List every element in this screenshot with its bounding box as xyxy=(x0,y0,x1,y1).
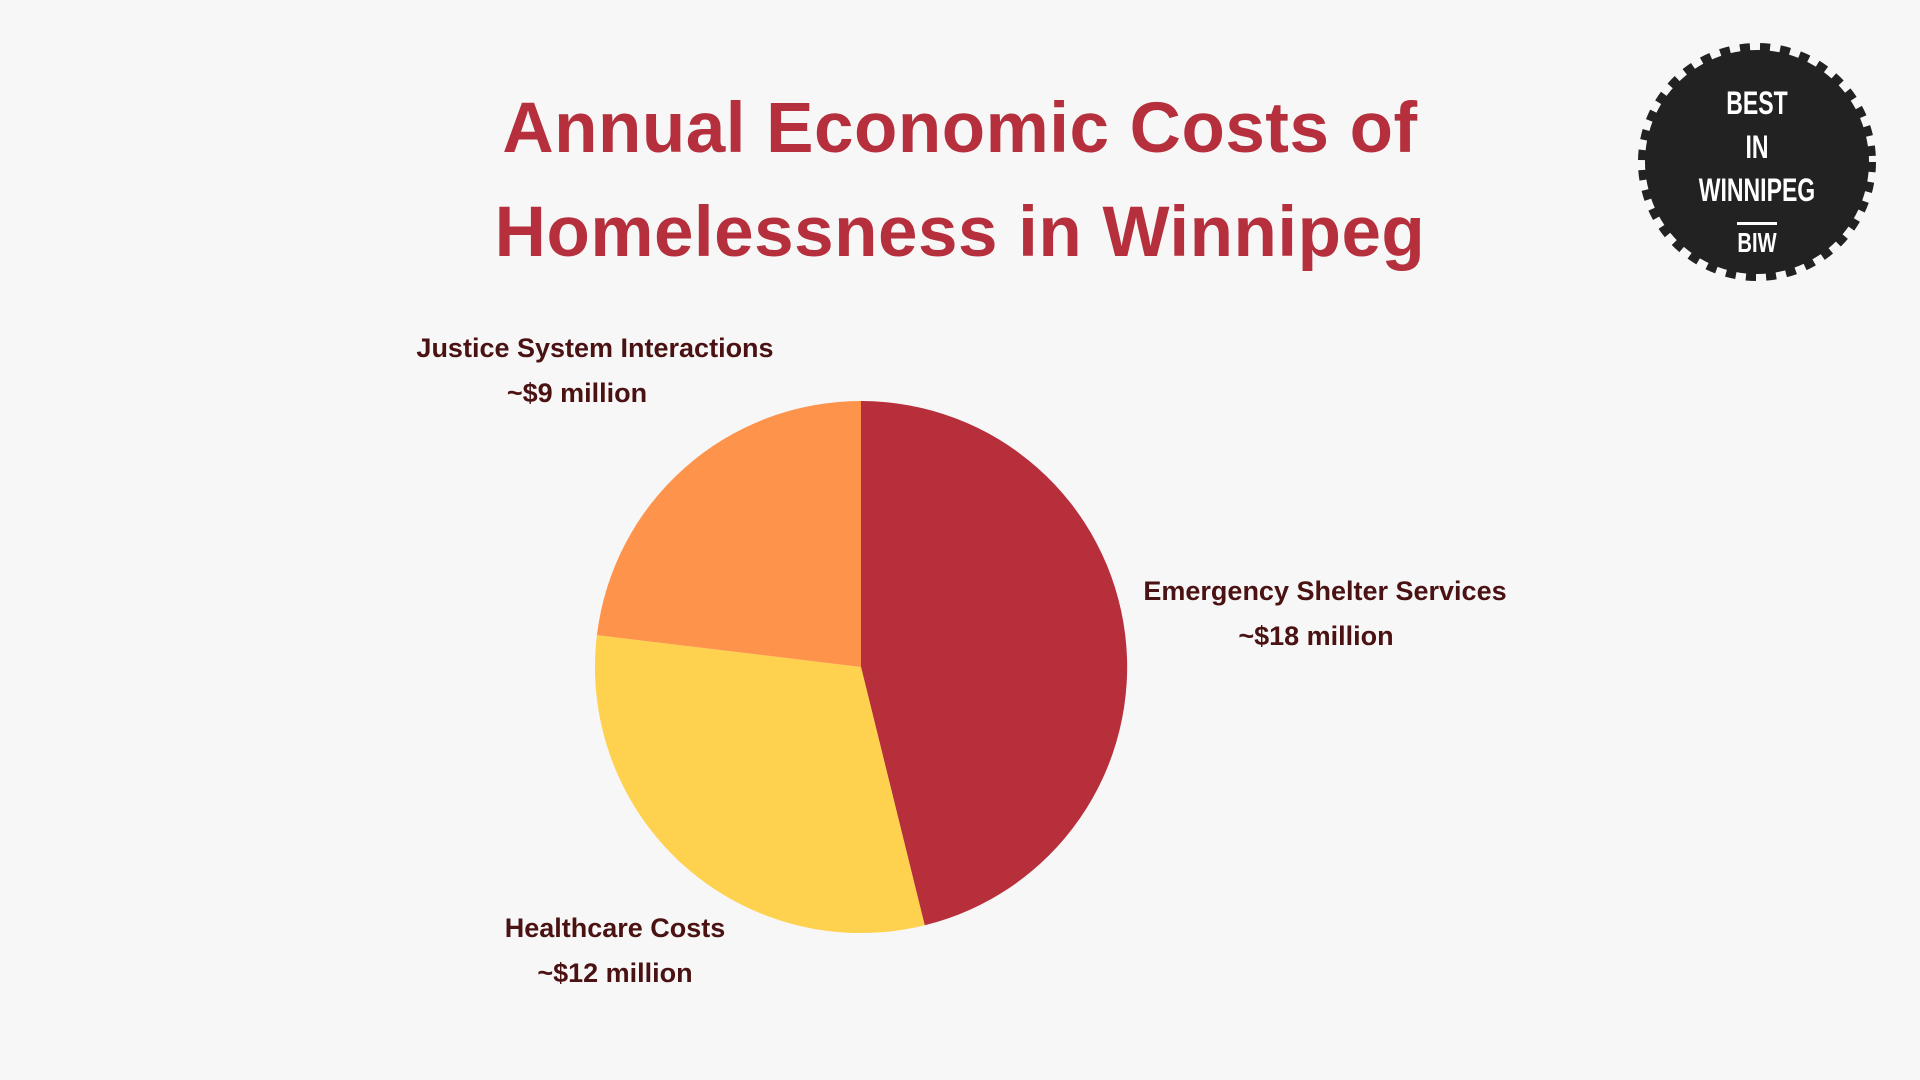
title: Homelessness in Winnipeg xyxy=(495,193,1425,272)
slice: emergency shelter services xyxy=(861,401,1127,925)
badge: best in winnipeg: BIW xyxy=(1737,228,1777,259)
label: emergency shelter: Emergency Shelter Services xyxy=(1143,576,1507,606)
label: healthcare: ~$12 million xyxy=(537,958,693,988)
title: Annual Economic Costs of xyxy=(502,89,1418,168)
badge: best in winnipeg: BEST xyxy=(1726,85,1788,121)
label: emergency shelter xyxy=(1143,576,1507,651)
slice: justice system interactions xyxy=(597,401,861,667)
label: emergency shelter: ~$18 million xyxy=(1238,621,1394,651)
slice: healthcare costs xyxy=(595,635,925,933)
label: justice system xyxy=(416,333,774,408)
label: justice system: Justice System Interactions xyxy=(416,333,774,363)
label: healthcare: Healthcare Costs xyxy=(505,913,725,943)
badge: best in winnipeg: IN xyxy=(1745,129,1769,165)
title xyxy=(495,89,1425,272)
badge: best in winnipeg: WINNIPEG xyxy=(1699,172,1815,208)
label: justice system: ~$9 million xyxy=(507,378,647,408)
label: healthcare xyxy=(505,913,725,988)
badge: best in winnipeg xyxy=(1638,43,1876,281)
